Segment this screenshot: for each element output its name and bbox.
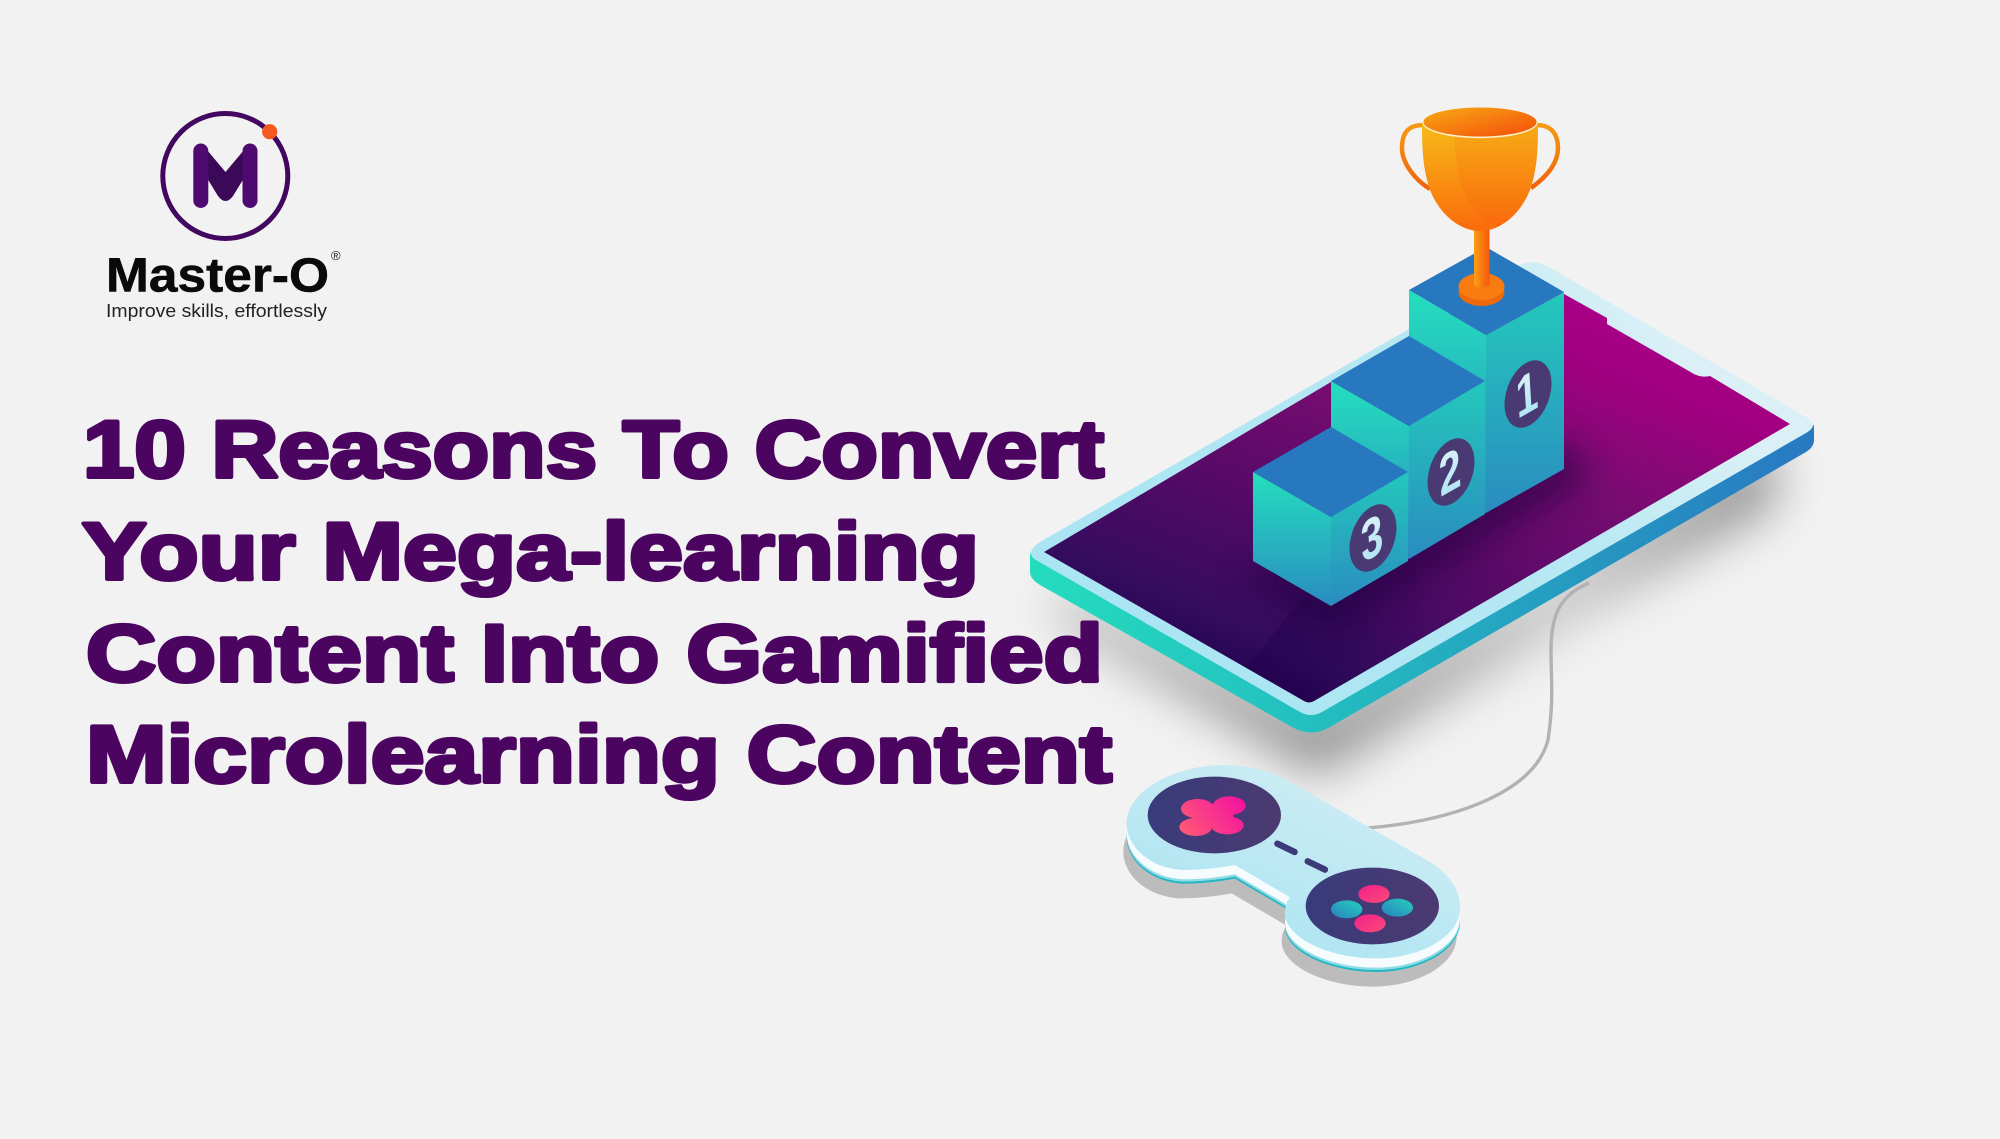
controller body xyxy=(1127,765,1460,958)
controller side white xyxy=(1127,774,1460,968)
logo ring xyxy=(163,114,288,238)
podium box 1 xyxy=(1409,247,1564,513)
trophy base xyxy=(1458,279,1504,306)
podium box 3 xyxy=(1253,427,1408,606)
podium box 2: 2 xyxy=(1437,434,1463,509)
logo letter M xyxy=(201,150,250,201)
phone xyxy=(1030,262,1814,732)
logo tagline: Improve skills, effortlessly xyxy=(106,300,328,321)
trophy handles xyxy=(1402,125,1558,189)
podium xyxy=(1253,247,1564,606)
trophy stem xyxy=(1474,228,1490,288)
phone side edge xyxy=(1030,425,1814,732)
trophy cup shading xyxy=(1454,123,1538,227)
title xyxy=(82,405,1112,800)
logo wordmark: Master-O xyxy=(106,250,329,303)
trophy rim xyxy=(1422,107,1538,138)
trophy cup xyxy=(1422,123,1538,231)
title line 2: Your Mega-learning xyxy=(82,507,979,597)
podium box 3: 3 xyxy=(1359,500,1385,575)
trophy xyxy=(1402,107,1558,306)
podium box 1: 1 xyxy=(1514,356,1540,431)
registered mark: ® xyxy=(331,248,341,263)
game controller xyxy=(1123,765,1460,987)
start and select buttons xyxy=(1277,844,1325,870)
podium shadow on screen xyxy=(1240,440,1590,635)
podium box 2 xyxy=(1331,336,1485,559)
logo: Master-O xyxy=(106,114,341,321)
logo orange dot xyxy=(262,124,277,139)
controller shadow xyxy=(1123,793,1457,987)
controller side teal xyxy=(1127,779,1460,972)
phone bezel xyxy=(1031,262,1813,715)
right pad xyxy=(1306,868,1439,944)
trophy rim interior xyxy=(1424,108,1536,136)
directional cross xyxy=(1179,796,1246,836)
number badge 1 xyxy=(1496,354,1560,434)
title line 3: Content Into Gamified xyxy=(86,609,1103,699)
title line 1: 10 Reasons To Convert xyxy=(83,405,1104,495)
action buttons xyxy=(1331,885,1413,932)
left pad xyxy=(1148,777,1281,853)
number badge 3 xyxy=(1341,498,1405,578)
screen shaded facet xyxy=(1247,561,1450,702)
cable xyxy=(1368,583,1589,828)
number badge 2 xyxy=(1419,432,1483,512)
phone screen xyxy=(1044,270,1790,702)
phone drop shadow xyxy=(1055,440,1775,775)
trophy base top xyxy=(1458,273,1504,300)
controller side mid xyxy=(1127,777,1460,970)
title line 4: Microlearning Content xyxy=(86,710,1112,800)
